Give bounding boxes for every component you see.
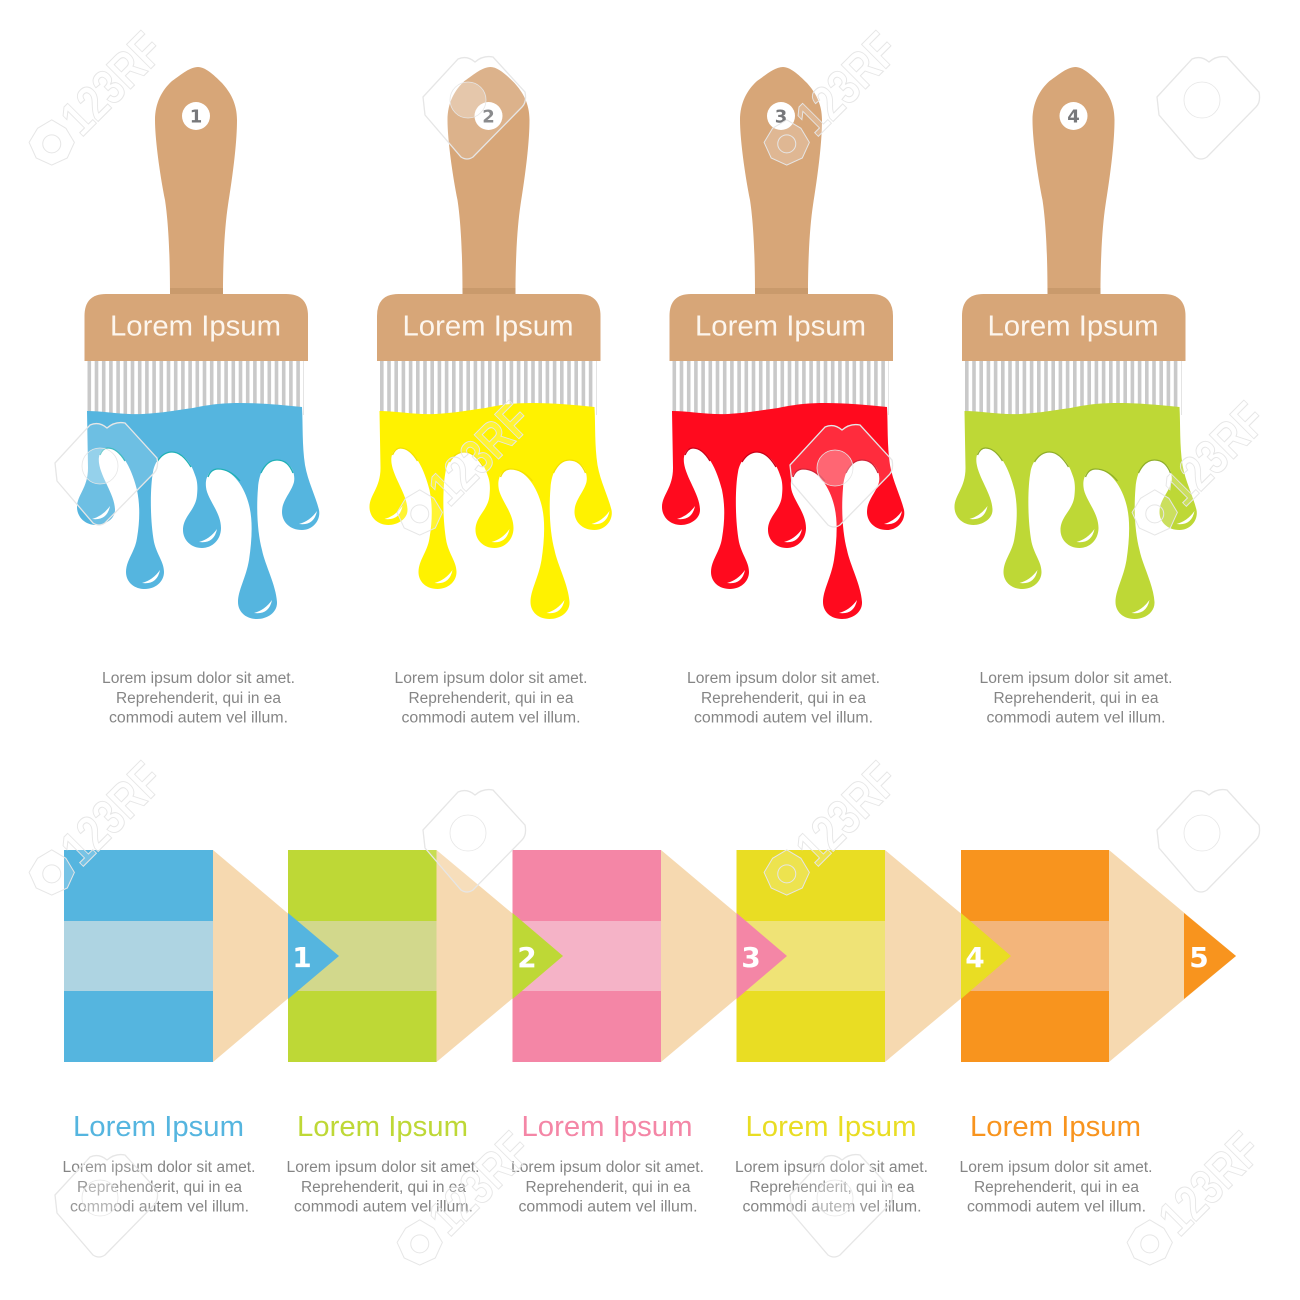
brush text 1: Reprehenderit, qui in ea (116, 690, 281, 707)
brush 3: red (662, 67, 904, 619)
brush 1: blue (77, 67, 319, 619)
brush label 1: Lorem Ipsum (110, 310, 281, 342)
brush text 3: Lorem ipsum dolor sit amet. (687, 670, 880, 687)
number badge 4: 4 (1067, 106, 1080, 128)
pencil title 3: Lorem Ipsum (522, 1111, 692, 1143)
pencil text 4: commodi autem vel illum. (742, 1198, 922, 1216)
brush text 2 (394, 670, 588, 726)
pencil text 1 (62, 1159, 256, 1216)
pencil 1: blue (64, 850, 339, 1062)
pencil text 5: Lorem ipsum dolor sit amet. (960, 1159, 1152, 1176)
number badge 2: 2 (482, 106, 495, 128)
brush text 4: Reprehenderit, qui in ea (994, 690, 1159, 707)
pencil text 2 (286, 1159, 480, 1216)
pencil text 2: Reprehenderit, qui in ea (301, 1179, 466, 1196)
pencil 3: pink: 3 (741, 941, 761, 974)
paint drips green (954, 403, 1197, 619)
pencil text 4: Lorem ipsum dolor sit amet. (735, 1159, 928, 1176)
number badge 3: 3 (775, 106, 787, 128)
pencil 4: yellow: 4 (965, 941, 985, 974)
pencil text 5: commodi autem vel illum. (967, 1198, 1146, 1216)
brush text 3 (687, 670, 880, 726)
pencil text 3: Reprehenderit, qui in ea (526, 1179, 691, 1196)
pencil text 5 (960, 1159, 1152, 1216)
brush text 3: commodi autem vel illum. (694, 710, 873, 726)
pencil text 2: commodi autem vel illum. (294, 1198, 473, 1216)
brush label 4: Lorem Ipsum (988, 310, 1158, 342)
pencil text 1: commodi autem vel illum. (70, 1198, 249, 1216)
number badge 2 (474, 102, 502, 130)
pencil 3: pink (512, 850, 787, 1062)
pencil text 5: Reprehenderit, qui in ea (974, 1179, 1139, 1196)
number badge 1 (182, 102, 210, 130)
pencil 2: green (288, 850, 563, 1062)
pencil 1: blue: 1 (292, 941, 312, 974)
brush text 2: Reprehenderit, qui in ea (408, 690, 574, 707)
brush label 2: Lorem Ipsum (402, 310, 574, 342)
pencil text 4 (735, 1159, 928, 1216)
pencil text 1: Lorem ipsum dolor sit amet. (62, 1159, 256, 1176)
brush label 3: Lorem Ipsum (695, 310, 866, 342)
pencil 5: orange (961, 850, 1236, 1062)
number badge 3 (767, 102, 795, 130)
brush text 1 (102, 670, 295, 726)
brush body 1 (84, 67, 308, 388)
pencil text 3 (511, 1159, 704, 1216)
brush text 4: Lorem ipsum dolor sit amet. (980, 670, 1172, 687)
brush 4: green (954, 67, 1197, 619)
pencil title 4: Lorem Ipsum (746, 1111, 916, 1143)
pencil text 3: Lorem ipsum dolor sit amet. (511, 1159, 704, 1176)
pencil title 1: Lorem Ipsum (73, 1111, 244, 1143)
paint drips yellow (370, 403, 612, 619)
pencil 4: yellow (736, 850, 1011, 1062)
pencil text 1: Reprehenderit, qui in ea (77, 1179, 242, 1196)
pencil 5: orange: 5 (1189, 941, 1209, 974)
pencil 2: green: 2 (517, 941, 537, 974)
paint drips red (662, 403, 904, 619)
brush text 4: commodi autem vel illum. (986, 710, 1166, 726)
brush text 2: Lorem ipsum dolor sit amet. (394, 670, 588, 687)
brush body 4 (962, 67, 1186, 388)
pencil text 4: Reprehenderit, qui in ea (750, 1179, 915, 1196)
brush 2: yellow (370, 67, 612, 619)
pencil title 5: Lorem Ipsum (970, 1111, 1141, 1143)
brush text 3: Reprehenderit, qui in ea (701, 690, 866, 707)
brush body 2 (377, 67, 600, 388)
paint drips blue (77, 403, 319, 619)
brush text 2: commodi autem vel illum. (402, 710, 580, 726)
brush text 1: commodi autem vel illum. (109, 710, 288, 726)
brush text 1: Lorem ipsum dolor sit amet. (102, 670, 295, 687)
pencil text 2: Lorem ipsum dolor sit amet. (286, 1159, 480, 1176)
number badge 4 (1060, 102, 1088, 130)
pencil title 2: Lorem Ipsum (297, 1111, 468, 1143)
brush body 3 (670, 67, 893, 388)
pencil text 3: commodi autem vel illum. (518, 1198, 698, 1216)
brush text 4 (980, 670, 1172, 726)
number badge 1: 1 (190, 106, 202, 128)
